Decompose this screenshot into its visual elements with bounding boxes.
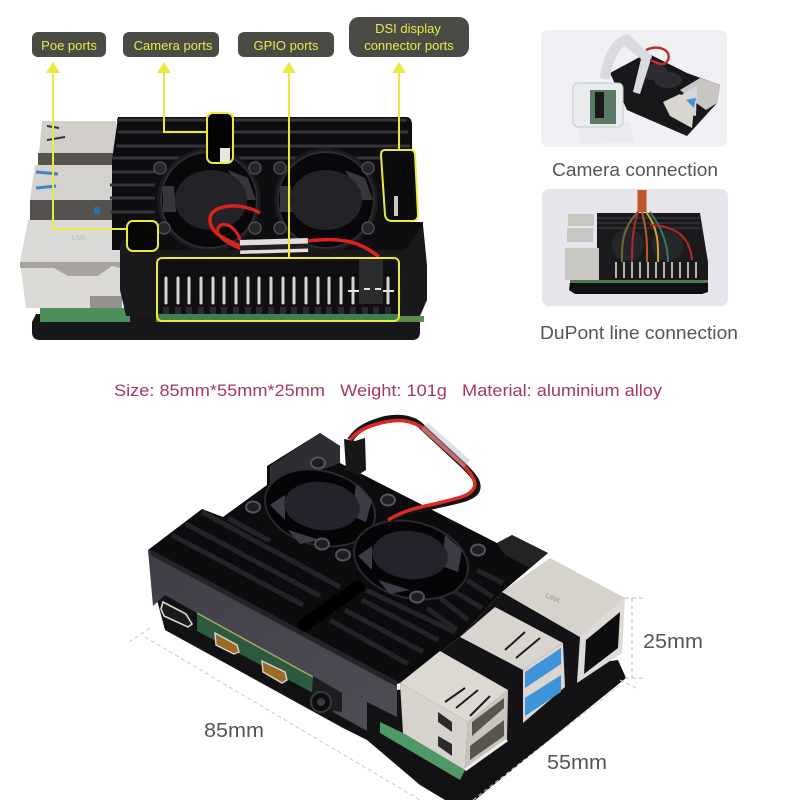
dimension line: 25mm — [625, 598, 644, 678]
dimension label: 85mm: 85mm — [204, 720, 264, 742]
label: Camera ports: Camera ports — [134, 38, 213, 53]
arrow: Poe ports — [46, 62, 127, 229]
ethernet port: LINK — [544, 592, 562, 606]
micro HDMI port 1 — [215, 633, 239, 654]
label: GPIO ports — [238, 32, 334, 57]
micro HDMI port 2 — [262, 661, 287, 683]
USB-C port — [161, 602, 192, 627]
DuPont wires — [622, 212, 692, 262]
dimension line: 55mm — [473, 680, 636, 800]
fan left — [157, 148, 261, 252]
circuit board edge — [40, 308, 130, 322]
label: GPIO ports: GPIO ports — [253, 38, 319, 53]
base plate — [153, 585, 626, 800]
caption: DuPont line connection: DuPont line connection — [540, 323, 738, 343]
audio jack — [311, 676, 342, 712]
highlight box: DSI — [381, 150, 418, 221]
arrow: DSI ports — [392, 62, 406, 150]
label: DSI display connector ports: connector ports — [364, 38, 454, 53]
dimension line: 85mm — [129, 627, 420, 800]
panel: DuPont line connection photo — [542, 189, 728, 306]
fan right — [274, 148, 378, 252]
circuit board under ports — [380, 722, 465, 780]
label: Poe ports — [32, 32, 106, 57]
dimension label: 55mm: 55mm — [547, 752, 607, 774]
heatsink upper fins — [110, 117, 423, 250]
mini case — [610, 53, 720, 136]
GPIO header — [158, 258, 398, 320]
red wire — [646, 48, 669, 64]
label: Poe ports: Poe ports — [41, 38, 97, 53]
front fan — [346, 509, 476, 611]
fan wire with connector — [344, 418, 478, 520]
fan screws — [154, 162, 374, 234]
label: DSI display connector ports — [349, 17, 469, 57]
panel: camera connection photo — [541, 30, 727, 147]
camera in clear mount — [578, 122, 634, 144]
rear post — [270, 433, 340, 495]
rear fan — [257, 459, 383, 557]
side wall — [148, 550, 397, 731]
bottom product photo: isometric case — [148, 418, 626, 800]
fins — [150, 512, 503, 684]
notch corner — [497, 535, 548, 568]
ethernet port — [502, 558, 625, 683]
ribbon cable — [600, 34, 652, 94]
base plate — [32, 314, 420, 340]
specification line: Size: 85mm*55mm*25mm Weight: 101g Material: aluminium alloy — [114, 381, 663, 400]
highlight box: camera — [207, 113, 233, 163]
label: DSI display connector ports: DSI display — [375, 21, 441, 36]
mini case — [570, 213, 708, 290]
slit in fins — [304, 587, 358, 625]
highlight box: GPIO — [157, 258, 399, 321]
heatsink top — [148, 433, 548, 684]
USB 3 port — [30, 165, 112, 220]
USB 2 port — [38, 121, 116, 165]
fan wire loop — [210, 206, 379, 257]
screws — [246, 458, 485, 602]
highlight box: PoE — [127, 221, 158, 251]
lower opening under wall — [197, 613, 330, 702]
top product photo: case viewed from above — [20, 113, 427, 340]
arrow: GPIO ports — [282, 62, 296, 258]
case lower body — [120, 225, 427, 316]
ethernet port: LNK — [72, 235, 86, 242]
arrow: Camera ports — [157, 62, 207, 132]
ethernet port — [20, 220, 122, 308]
label: Camera ports — [123, 32, 219, 57]
caption: camera connection: Camera connection — [552, 160, 718, 180]
black backing behind ports — [400, 592, 622, 775]
dimension label: 25mm: 25mm — [643, 631, 703, 653]
USB 3 port stack — [460, 607, 565, 723]
USB 2 port stack — [400, 651, 508, 770]
